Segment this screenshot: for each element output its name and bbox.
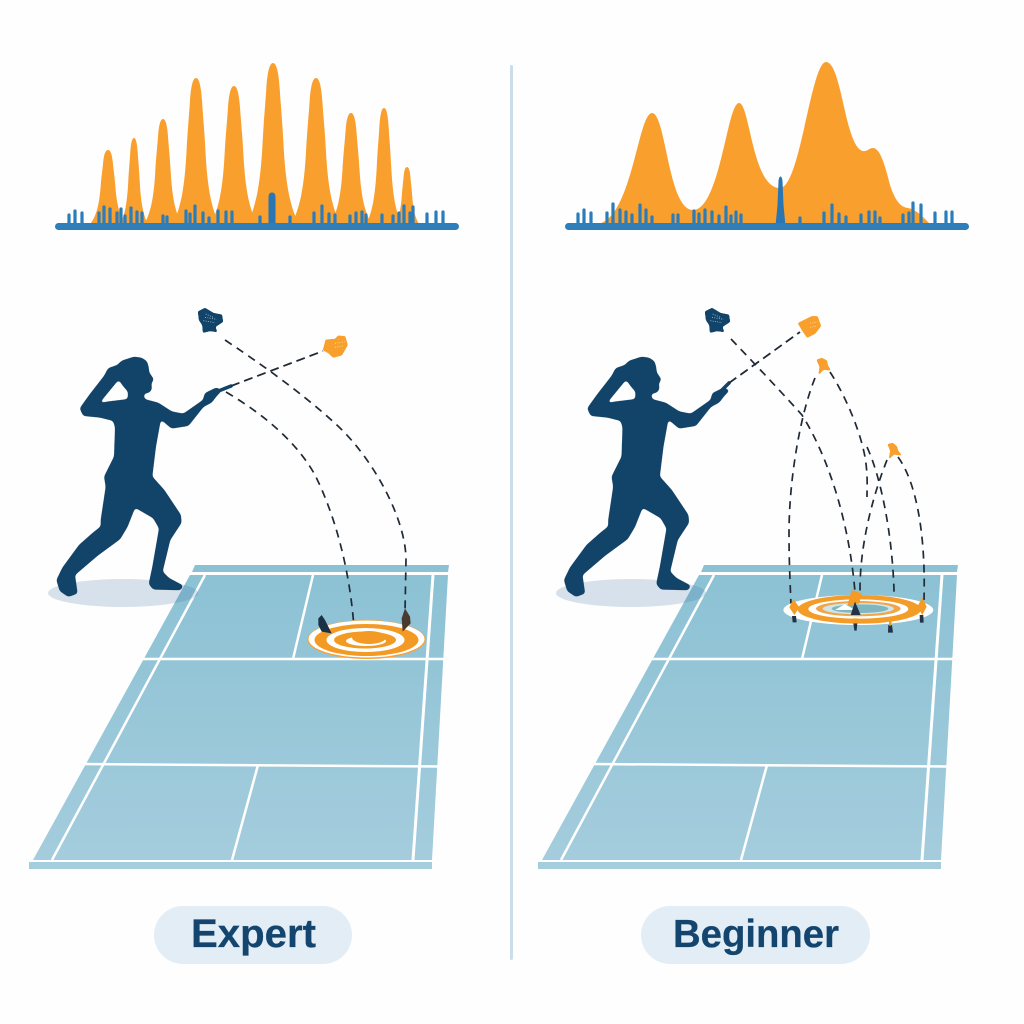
- label pill: beginner: [641, 906, 870, 964]
- shuttlecock: orange rebound two: [888, 443, 901, 458]
- chart: expert orange rhythm waveform: [87, 63, 422, 226]
- trajectory: racket to orange shuttle: [729, 332, 800, 383]
- chart: beginner orange rhythm waveform: [598, 62, 930, 226]
- target: beginner scattered landing rings: [783, 595, 933, 625]
- shuttlecock: orange contact: [798, 317, 821, 337]
- divider between panels: [510, 65, 513, 960]
- trajectory: expert flight path outer: [225, 340, 406, 612]
- shuttlecock: dark start: [198, 308, 223, 332]
- player shadow: beginner: [556, 579, 706, 607]
- label pill: expert: Expert: [191, 912, 316, 956]
- racket handle: expert: [216, 386, 231, 392]
- panel: beginner: [538, 62, 969, 964]
- player silhouette: expert: [57, 357, 222, 597]
- player silhouette: beginner: [564, 357, 729, 597]
- target: expert tight landing rings: [308, 620, 426, 659]
- trajectories: beginner scattered flight paths: [731, 339, 924, 622]
- label pill: expert: [154, 906, 352, 964]
- shuttlecock: orange contact: [323, 336, 347, 357]
- chart: beginner blue tick baseline: [565, 176, 969, 230]
- shuttlecock: orange rebound one: [817, 358, 830, 374]
- racket handle: beginner: [720, 383, 729, 392]
- chart: expert blue tick baseline: [55, 192, 459, 230]
- label pill: beginner: Beginner: [673, 913, 839, 956]
- trajectory: racket to orange shuttle: [231, 351, 323, 386]
- court: beginner: [538, 565, 958, 869]
- shuttlecock: dark start: [705, 308, 730, 332]
- player shadow: expert: [48, 579, 198, 607]
- panel: expert: [29, 63, 459, 964]
- trajectory: expert flight path inner: [226, 392, 354, 628]
- landed shuttles: beginner: [789, 590, 927, 633]
- court: expert: [29, 565, 449, 869]
- landed shuttles: expert: [318, 608, 411, 633]
